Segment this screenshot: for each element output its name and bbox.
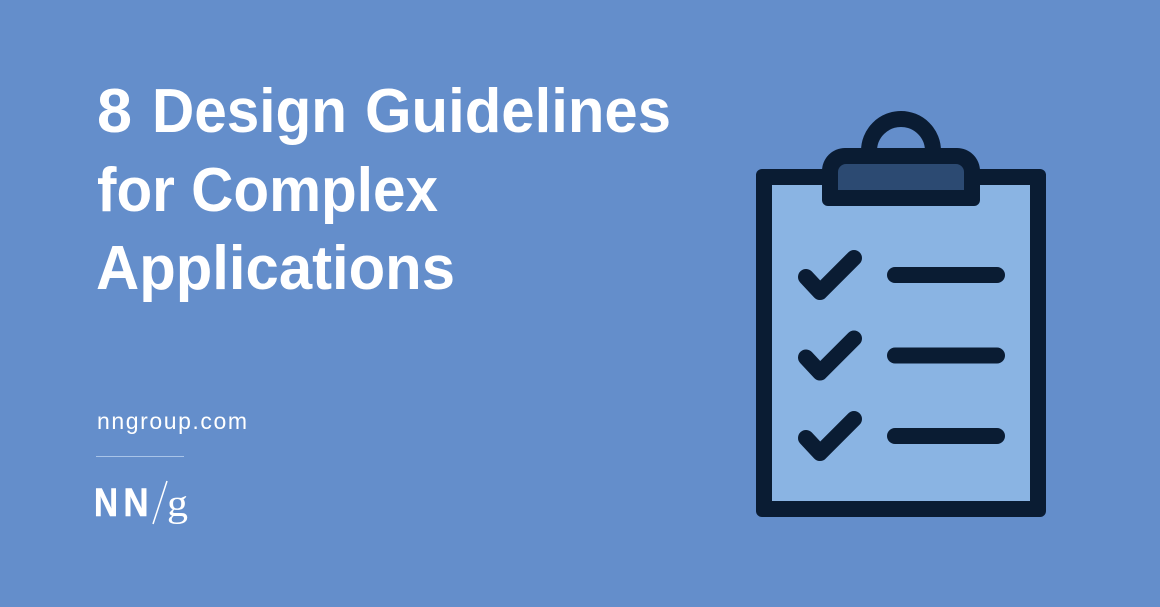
title — [96, 77, 671, 303]
logo: NN/g — [94, 481, 188, 525]
clipboard board — [756, 169, 1046, 517]
title: for Complex — [97, 156, 438, 225]
checklist row 3 — [806, 419, 997, 453]
title: Guidelines — [365, 77, 671, 146]
title: 8 — [97, 77, 132, 146]
clipboard clip — [822, 148, 980, 206]
checklist row 1 — [806, 258, 997, 292]
website url: nngroup.com — [97, 408, 247, 434]
title: Design — [152, 77, 347, 146]
checklist row 2 — [806, 338, 997, 372]
logo: NN/g: N — [124, 481, 148, 525]
logo: NN/g: g — [167, 483, 188, 525]
logo: NN/g: N — [94, 481, 118, 525]
icon: clipboard checklist — [756, 119, 1046, 517]
title: Applications — [96, 234, 455, 303]
clipboard ring — [869, 119, 933, 152]
